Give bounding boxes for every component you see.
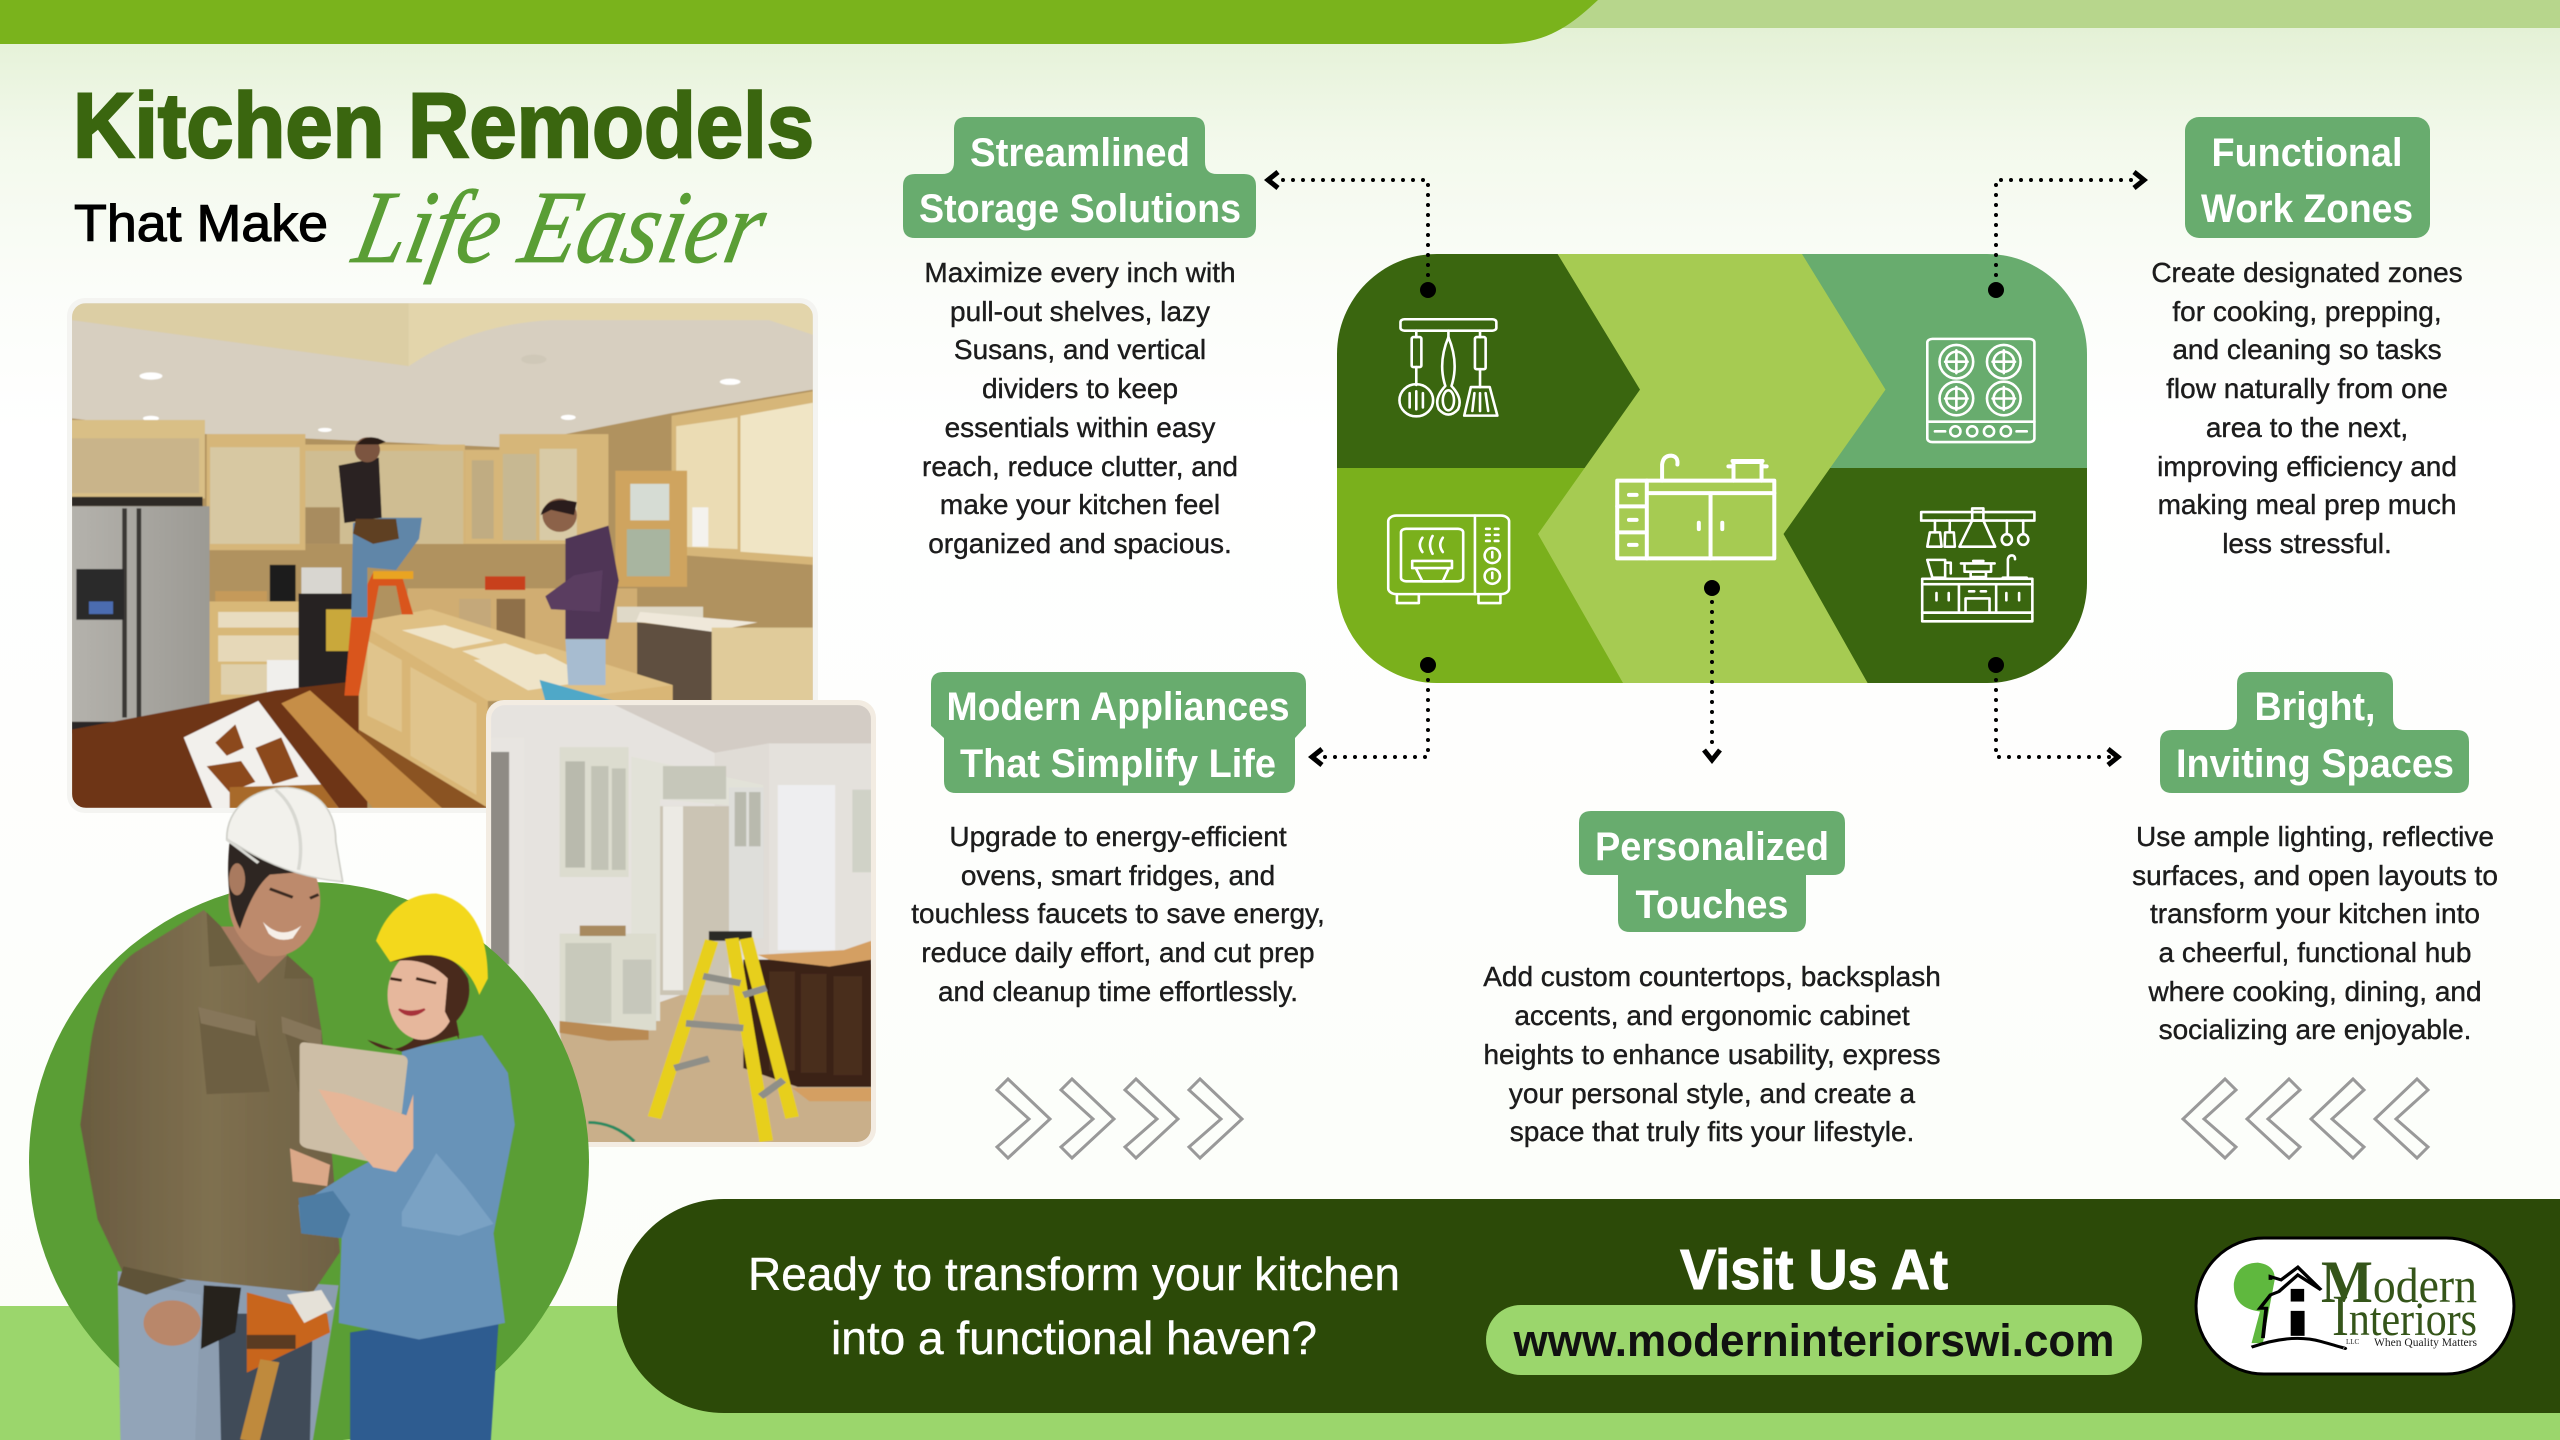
icon: kitchen with hood	[1921, 508, 2034, 621]
body text: improving efficiency and	[2157, 451, 2457, 482]
body text: space that truly fits your lifestyle.	[1510, 1116, 1914, 1147]
heading pill	[2185, 117, 2430, 238]
body text: flow naturally from one	[2166, 373, 2448, 404]
top banner	[0, 0, 2560, 44]
logo: Modern Interiors: Modern	[2321, 1249, 2477, 1315]
body text: less stressful.	[2222, 528, 2392, 559]
body text: transform your kitchen into	[2150, 898, 2480, 929]
photo: two workers with tablet	[80, 787, 515, 1440]
body text: dividers to keep	[982, 373, 1178, 404]
body text: ovens, smart fridges, and	[961, 860, 1275, 891]
card: Modern Appliances	[911, 672, 1325, 1158]
logo: Modern Interiors: Interiors	[2332, 1283, 2477, 1348]
body text: pull-out shelves, lazy	[950, 296, 1210, 327]
body text: area to the next,	[2206, 412, 2408, 443]
icon: sink cabinet with pot	[1617, 456, 1774, 558]
heading pill: Streamlined	[970, 131, 1190, 175]
body text: reach, reduce clutter, and	[922, 451, 1238, 482]
icon: right chevrons	[997, 1079, 1242, 1158]
body text: Maximize every inch with	[924, 257, 1236, 288]
body text: accents, and ergonomic cabinet	[1514, 1000, 1910, 1031]
man	[80, 787, 343, 1440]
icon: gas cooktop	[1927, 339, 2034, 442]
woman	[290, 894, 515, 1440]
call to action text: into a functional haven?	[831, 1312, 1317, 1364]
body text: essentials within easy	[945, 412, 1215, 443]
website pill: www.moderninteriorswi.com	[1513, 1315, 2114, 1366]
body text: Add custom countertops, backsplash	[1483, 961, 1941, 992]
body text: a cheerful, functional hub	[2159, 937, 2471, 968]
heading pill: Work Zones	[2201, 187, 2413, 231]
body text: and cleaning so tasks	[2172, 334, 2442, 365]
logo: Modern Interiors	[2196, 1238, 2514, 1374]
photo: white cabinets and ladder	[486, 700, 876, 1147]
heading pill	[1579, 811, 1845, 932]
body text: making meal prep much	[2158, 489, 2456, 520]
body text: socializing are enjoyable.	[2159, 1014, 2471, 1045]
photo: kitchen under construction	[67, 298, 818, 813]
body text: reduce daily effort, and cut prep	[921, 937, 1315, 968]
call to action banner	[617, 1199, 2560, 1413]
heading pill: Inviting Spaces	[2176, 742, 2454, 786]
title line: That Make: That Make	[74, 195, 328, 253]
heading pill	[2160, 672, 2469, 793]
title line: Life Easier: Life Easier	[344, 169, 777, 285]
heading pill: Modern Appliances	[946, 685, 1290, 729]
card: Functional Work Zones	[2151, 117, 2463, 559]
body text: touchless faucets to save energy,	[911, 898, 1325, 929]
body text: for cooking, prepping,	[2172, 296, 2442, 327]
body text: heights to enhance usability, express	[1483, 1039, 1941, 1070]
green circle behind workers	[29, 882, 589, 1440]
heading pill	[931, 672, 1306, 793]
heading pill: Touches	[1636, 883, 1788, 927]
logo: Modern Interiors: LLC	[2346, 1338, 2360, 1346]
heading pill: Storage Solutions	[919, 187, 1241, 231]
heading pill	[903, 117, 1256, 238]
bottom band	[0, 1306, 2560, 1440]
logo tree and house	[2234, 1263, 2345, 1348]
body text: Susans, and vertical	[954, 334, 1206, 365]
heading pill: That Simplify Life	[960, 742, 1276, 786]
call to action text: Ready to transform your kitchen	[748, 1248, 1400, 1300]
central kitchen diagram	[1337, 254, 2087, 683]
title line: Kitchen Remodels: Kitchen Remodels	[73, 75, 814, 177]
body text: surfaces, and open layouts to	[2132, 860, 2498, 891]
website pill	[1486, 1305, 2142, 1375]
heading pill: Bright,	[2254, 685, 2376, 729]
icon: left chevrons	[2183, 1079, 2428, 1158]
card: Personalized Touches	[1483, 811, 1941, 1147]
icon: hanging utensils	[1399, 319, 1497, 416]
logo: Modern Interiors: When Quality Matters	[2374, 1335, 2477, 1349]
body text: where cooking, dining, and	[2147, 976, 2482, 1007]
body text: Create designated zones	[2151, 257, 2463, 288]
heading pill: Personalized	[1595, 825, 1829, 869]
visit us heading: Visit Us At	[1680, 1238, 1948, 1302]
heading pill: Functional	[2212, 131, 2402, 175]
card: Bright, Inviting Spaces	[2132, 672, 2498, 1158]
icon: microwave	[1388, 516, 1509, 603]
body text: Use ample lighting, reflective	[2136, 821, 2494, 852]
card: Streamlined Storage Solutions	[903, 117, 1256, 559]
title	[73, 75, 814, 285]
body text: and cleanup time effortlessly.	[938, 976, 1298, 1007]
body text: your personal style, and create a	[1509, 1078, 1916, 1109]
body text: make your kitchen feel	[940, 489, 1220, 520]
dotted connectors	[1268, 172, 2144, 765]
body text: organized and spacious.	[928, 528, 1232, 559]
body text: Upgrade to energy-efficient	[949, 821, 1287, 852]
